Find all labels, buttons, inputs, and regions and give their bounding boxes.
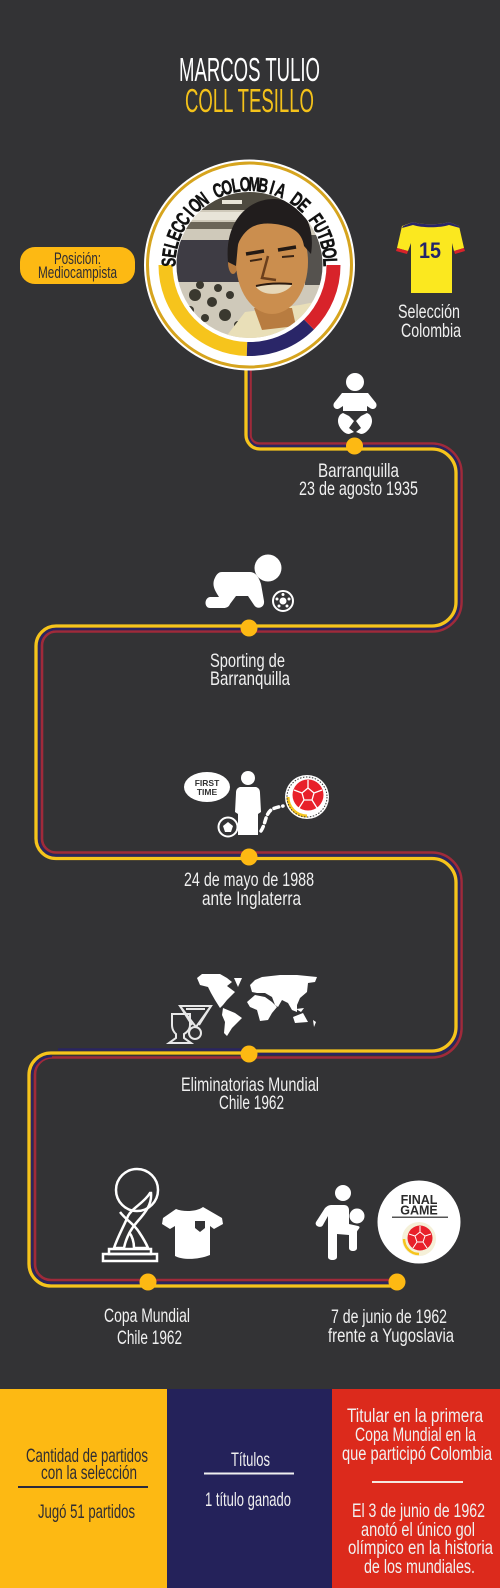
timeline nodes	[140, 438, 406, 1290]
icon: crawling child with ball	[206, 554, 293, 611]
label: debut	[184, 869, 314, 910]
label: qualifiers	[181, 1074, 319, 1114]
label: world cup: Chile 1962	[117, 1327, 182, 1349]
title: MARCOS TULIO	[179, 51, 320, 88]
label: club: Barranquilla	[210, 668, 290, 690]
medallion lettering: E	[163, 227, 187, 244]
icon: player with ball	[316, 1185, 364, 1260]
speech bubble: TIME	[197, 787, 217, 797]
timeline path	[29, 366, 462, 1286]
person	[235, 771, 261, 835]
medallion lettering: L	[160, 237, 184, 251]
label: jersey: Selección	[398, 301, 460, 323]
medallion lettering: B	[315, 237, 339, 252]
speech bubble	[184, 772, 230, 802]
medallion lettering: L	[230, 174, 242, 197]
icon: yellow jersey 15	[396, 222, 465, 293]
medallion lettering: L	[319, 258, 341, 267]
label: jersey	[398, 301, 461, 342]
medallion lettering: O	[219, 176, 235, 200]
ball	[218, 818, 238, 836]
medallion lettering: C	[171, 209, 195, 230]
position pill	[20, 247, 135, 284]
medallion lettering: O	[317, 246, 341, 260]
label: qualifiers: Chile 1962	[219, 1092, 284, 1114]
icon: baby	[333, 373, 377, 434]
player medallion	[144, 160, 355, 370]
label: club: Sporting de	[210, 650, 285, 672]
icon: yellow jersey 15: 15	[419, 238, 441, 263]
medallion lettering: I	[179, 203, 199, 221]
medallion lettering: B	[256, 174, 270, 198]
label: debut: ante Inglaterra	[202, 888, 301, 910]
position pill: Posición:	[54, 250, 101, 268]
panel: titles: Títulos	[231, 1449, 270, 1471]
medallion lettering: S	[158, 257, 180, 267]
panel: matches: Cantidad de partidos	[26, 1445, 148, 1467]
label: jersey: Colombia	[401, 320, 461, 342]
label: world cup	[104, 1305, 190, 1349]
medallion lettering: D	[286, 188, 307, 212]
panel: matches	[0, 1389, 167, 1588]
icon: white shirt	[162, 1207, 223, 1259]
label: final game: 7 de junio de 1962	[331, 1306, 447, 1328]
label: qualifiers: Eliminatorias Mundial	[181, 1074, 319, 1096]
label: debut: 24 de mayo de 1988	[184, 869, 314, 891]
dotted trajectory	[261, 806, 283, 831]
panel: matches: con la selección	[41, 1462, 137, 1484]
label: birth: Barranquilla	[318, 460, 399, 482]
icon: cup and medal	[169, 1006, 211, 1043]
label: final game	[328, 1306, 454, 1347]
panel: titles	[167, 1389, 332, 1588]
panel: facts	[332, 1389, 500, 1588]
medallion lettering: E	[158, 247, 182, 259]
Colombia badge	[285, 775, 329, 819]
medallion lettering: O	[239, 173, 251, 196]
label: final game: frente a Yugoslavia	[328, 1325, 454, 1347]
medallion lettering: I	[267, 177, 277, 199]
icon: first time debut	[184, 771, 329, 836]
player photo	[176, 192, 325, 338]
medallion lettering: F	[304, 210, 327, 229]
medallion lettering: T	[312, 227, 336, 244]
label: club	[210, 650, 290, 690]
title	[179, 51, 320, 119]
panel: matches: Jugó 51 partidos	[38, 1501, 135, 1523]
medallion lettering: M	[248, 173, 260, 196]
final game badge	[378, 1180, 460, 1264]
final game badge: FINAL	[401, 1193, 438, 1207]
icon: world cup trophy	[103, 1169, 158, 1261]
panel: titles: 1 título ganado	[205, 1489, 291, 1511]
tricolor band	[165, 265, 334, 349]
medallion lettering: U	[308, 218, 333, 237]
medallion lettering: C	[209, 179, 227, 203]
label: birth: 23 de agosto 1935	[299, 478, 418, 500]
position pill: Mediocampista	[38, 264, 118, 282]
final game badge: GAME	[400, 1204, 438, 1218]
medallion lettering	[158, 173, 341, 267]
label: world cup: Copa Mundial	[104, 1305, 190, 1327]
title: COLL TESILLO	[185, 82, 314, 119]
speech bubble: FIRST	[195, 778, 220, 788]
medallion lettering: O	[184, 194, 207, 217]
icon: world map	[197, 974, 317, 1036]
label: birth	[299, 460, 418, 500]
medallion lettering: N	[192, 188, 213, 212]
medallion lettering: C	[166, 218, 191, 237]
medallion lettering: A	[272, 179, 290, 203]
medallion lettering: E	[293, 194, 315, 217]
